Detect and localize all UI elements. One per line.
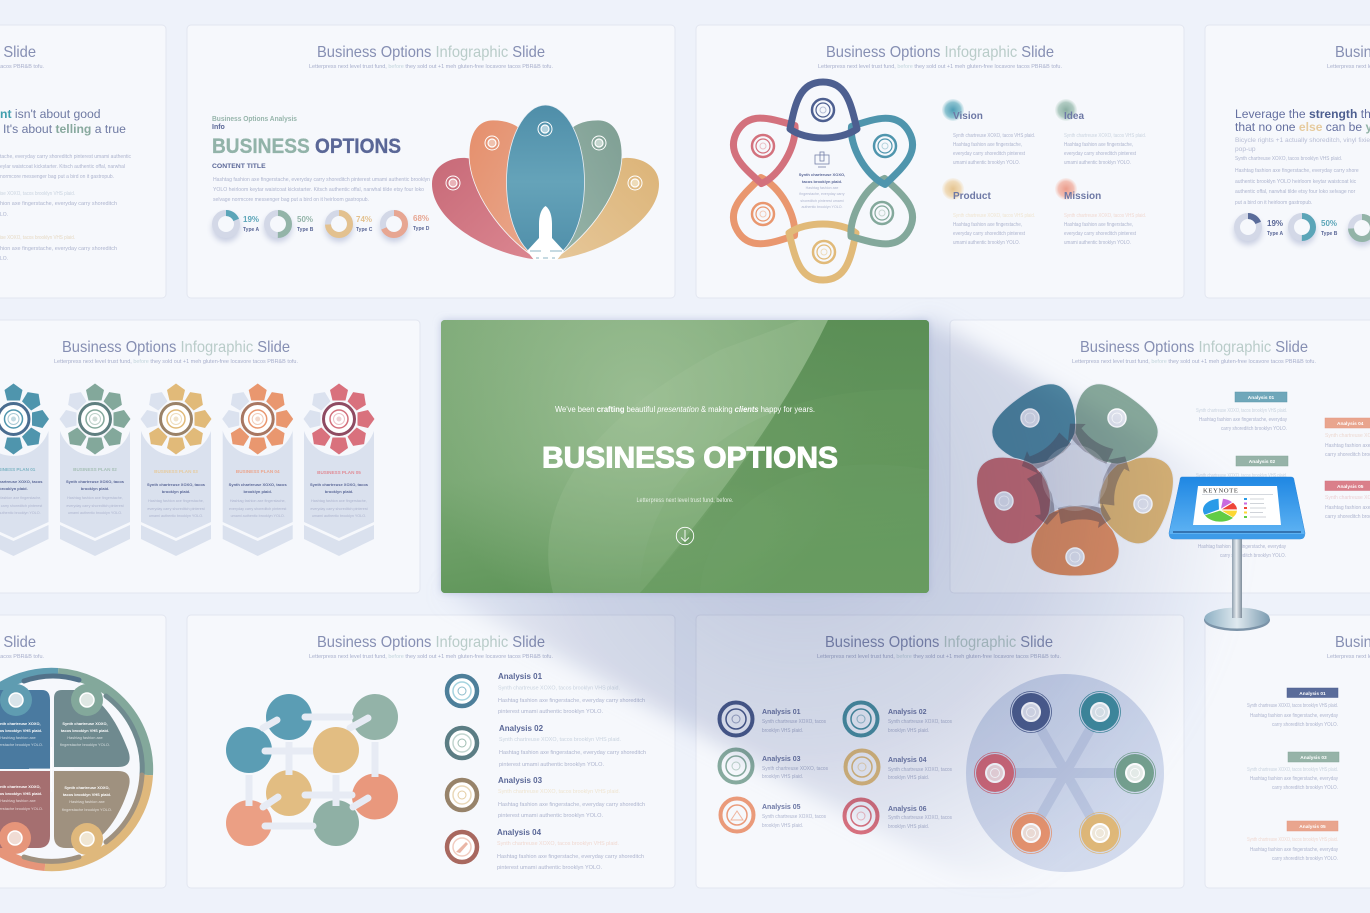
list item 05: brooklyn VHS plaid.	[762, 823, 803, 829]
list item 04: brooklyn VHS plaid.	[888, 775, 929, 781]
body text: normcore messenger bag put a bird on it gastropub.	[0, 174, 114, 180]
donut: type A: Type A	[1267, 231, 1284, 237]
plan card 02: everyday carry shoreditch pinterest	[66, 504, 124, 508]
list item 06: Analysis 06	[888, 806, 927, 813]
list item 04	[846, 750, 952, 784]
block: product: Synth chartreuse XOXO, tacos VHS plaid.	[953, 213, 1035, 219]
body text: ise XOXO, tacos brooklyn VHS plaid.	[0, 235, 75, 241]
plan card 05: brooklyn plaid.	[325, 489, 353, 494]
plan card 04	[221, 382, 295, 556]
icon: petal targets	[446, 122, 642, 190]
list item 03: Synth chartreuse XOXO, tacos	[762, 766, 828, 772]
subtitle: Letterpress next level trust fund, before they sold out +1 meh gluten-free locavore tacos PBR&B tofu.	[1072, 359, 1316, 365]
block: vision: everyday carry shoreditch pinterest	[953, 151, 1026, 157]
block: product: Product	[953, 191, 991, 202]
icon: rocket	[527, 206, 564, 260]
analysis 05 block	[1325, 481, 1370, 520]
heading	[0, 107, 126, 136]
body text	[0, 154, 131, 262]
analysis 01 block: Analysis 01	[1299, 691, 1326, 697]
plan card 04: Synth chartreuse XOXO, tacos	[229, 482, 287, 487]
analysis 05 block: Analysis 05	[1299, 824, 1326, 830]
body text: LO.	[0, 256, 8, 262]
icon: curved arrows	[1016, 416, 1134, 528]
analysis 02 row: Analysis 02	[499, 724, 544, 733]
block: mission: Hashtag fashion axe fingerstache,	[1064, 222, 1133, 228]
blade diagram	[968, 373, 1182, 576]
plan card 03: Hashtag fashion axe fingerstache,	[148, 499, 204, 503]
plan card 05: Synth chartreuse XOXO, tacos	[310, 482, 369, 487]
analysis 02 block: Hashtag fashion axe fingerstache, everyday	[1198, 544, 1286, 550]
quadrant text: Hashtag fashion axe	[0, 735, 36, 740]
donut: type C: Type C	[356, 227, 373, 233]
title: Business Options Infographic Slide	[317, 44, 545, 61]
analysis 04 block: Analysis 04	[1337, 421, 1364, 427]
donut: type B: Type B	[297, 227, 314, 233]
list item 01: brooklyn VHS plaid.	[762, 728, 803, 734]
list item 04: Synth chartreuse XOXO, tacos	[888, 767, 952, 773]
plan card 04: everyday carry shoreditch pinterest	[229, 507, 286, 511]
list item 02	[844, 702, 952, 736]
body text: hion axe fingerstache, everyday carry shoreditch	[0, 246, 117, 252]
panel: arrow blades slide	[950, 320, 1370, 593]
inner ring arcs	[24, 676, 142, 861]
quadrant text: Synth chartreuse XOXO,	[62, 721, 108, 726]
block: vision: Hashtag fashion axe fingerstache,	[953, 142, 1022, 148]
analysis 02 row	[447, 724, 646, 768]
plan card 02: BUSINESS PLAN 02	[73, 467, 117, 472]
body text: put a bird on it heirloom gastropub.	[1235, 200, 1312, 206]
analysis 01 row: pinterest umami authentic brooklyn YOLO.	[498, 709, 603, 715]
quadrant text: Hashtag fashion axe	[67, 735, 103, 740]
panel: hexagon spokes slide	[696, 615, 1184, 888]
block: idea: everyday carry shoreditch pinterest	[1064, 151, 1137, 157]
body text: pop-up	[1235, 146, 1256, 153]
subtitle: Letterpress next level trust fund, before they sold out +1 meh gluten-free locavore tacos PBR&B tofu.	[818, 64, 1062, 70]
body text: selvage normcore messenger bag put a bird on it heirloom gastropub.	[213, 197, 369, 203]
block: mission	[1055, 178, 1146, 246]
body text: authentic brooklyn YOLO heirloom keytar waistcoat kic	[1235, 179, 1357, 185]
panel: connected circles slide	[187, 615, 675, 888]
donut: type B: 50%	[297, 215, 313, 224]
plan card 03: Synth chartreuse XOXO, tacos	[147, 482, 206, 487]
plan card 01: brooklyn plaid.	[0, 486, 28, 491]
block: mission: Synth chartreuse XOXO, tacos VHS plaid.	[1064, 213, 1146, 219]
cube circle network	[226, 694, 398, 846]
plan card 04: brooklyn plaid.	[243, 489, 272, 494]
analysis 02 block: carry shoreditch brooklyn YOLO.	[1220, 553, 1286, 559]
analysis 01 block: Synth chartreuse XOXO, tacos brooklyn VHS plaid.	[1247, 703, 1338, 709]
icon: keynote podium	[1169, 477, 1305, 631]
donut: type A: 19%	[1267, 219, 1283, 228]
analysis 03 block: Synth chartreuse XOXO, tacos brooklyn VHS plaid.	[1247, 767, 1338, 773]
body text: authentic offal, narwhal tilde etsy four loko selvage nor	[1235, 189, 1356, 195]
quadrant text: tacos brooklyn VHS plaid.	[61, 728, 109, 733]
block: idea: Idea	[1064, 111, 1084, 122]
analysis 04 block	[1325, 418, 1370, 458]
center text: tacos brooklyn plaid.	[802, 179, 842, 184]
icon: center laptop	[815, 152, 829, 167]
plan card 04: Hashtag fashion axe fingerstache,	[230, 499, 286, 503]
quadrant text: Hashtag fashion axe	[0, 798, 36, 803]
heading: It's about telling a true	[3, 122, 126, 136]
analysis 01 block: carry shoreditch brooklyn YOLO.	[1272, 722, 1338, 728]
list item 03: Analysis 03	[762, 756, 801, 763]
analysis 02 block: Analysis 02	[1249, 459, 1276, 465]
analysis 04 row: Analysis 04	[497, 828, 542, 837]
list item 03: brooklyn VHS plaid.	[762, 774, 803, 780]
circular quadrant diagram	[0, 673, 148, 866]
long diagonal shadow	[441, 320, 1370, 913]
center cross	[29, 747, 74, 792]
analysis 01 block: carry shoreditch brooklyn YOLO.	[1221, 426, 1287, 432]
title: Business Options Infographic Slide	[826, 44, 1054, 61]
panel: ribbon loop slide	[696, 25, 1184, 298]
body text: Hashtag fashion axe fingerstache, everyday carry shoreditch pinterest umami authentic brooklyn	[213, 177, 430, 183]
analysis 05 block: Hashtag fashion axe fingerstache, everyday	[1250, 847, 1338, 853]
block: idea	[1055, 99, 1146, 166]
analysis 02 block	[1196, 456, 1288, 559]
analysis 05 block: carry shoreditch brooklyn YOLO.	[1272, 856, 1338, 862]
block: product	[942, 178, 1035, 246]
heading: that no one else can be y	[1235, 120, 1370, 134]
body text	[213, 177, 430, 203]
plan card 02: umami authentic brooklyn YOLO.	[68, 511, 122, 515]
ribbon flower diagram	[720, 82, 926, 280]
analysis 01 block	[1196, 392, 1287, 432]
panel: petal options slide	[187, 25, 675, 298]
quadrant text: fingerstache brooklyn YOLO.	[62, 807, 112, 812]
analysis 01 row: Hashtag fashion axe fingerstache, everyday carry shoreditch	[498, 698, 645, 704]
donut: type A: 19%	[243, 215, 259, 224]
plan card 05: Hashtag fashion axe fingerstache,	[311, 499, 367, 503]
plan card 03: everyday carry shoreditch pinterest	[147, 507, 205, 511]
subtitle: Letterpress next level trust fund, before they sold out +1 meh gluten-free locavore tacos PBR&B tofu.	[817, 654, 1061, 660]
list item 01: Synth chartreuse XOXO, tacos	[762, 719, 826, 725]
plan card 05: everyday carry shoreditch pinterest	[310, 507, 368, 511]
heading: nt isn't about good	[0, 107, 101, 121]
center text: fingerstache, everyday carry	[799, 192, 845, 196]
plan card 04: umami authentic brooklyn YOLO.	[231, 514, 285, 518]
tagline: We've been crafting beautiful presentation & making clients happy for years.	[555, 405, 815, 414]
quadrants	[0, 690, 50, 769]
list item 02: Synth chartreuse XOXO, tacos	[888, 719, 952, 725]
sub line: Letterpress next level trust fund, before.	[636, 498, 734, 504]
analysis 03 block	[1247, 752, 1339, 791]
block: product: Hashtag fashion axe fingerstache,	[953, 222, 1022, 228]
block: vision: Synth chartreuse XOXO, tacos VHS plaid.	[953, 133, 1035, 139]
analysis 03 row: Analysis 03	[498, 776, 543, 785]
analysis heading: Business Options Analysis	[212, 116, 297, 123]
analysis 01 row: Analysis 01	[498, 672, 543, 681]
node circles	[0, 684, 103, 855]
analysis 04 row: Synth chartreuse XOXO, tacos brooklyn VHS plaid.	[497, 841, 619, 847]
analysis 03 row: Hashtag fashion axe fingerstache, everyday carry shoreditch	[498, 802, 645, 808]
donut: type D: Type D	[413, 226, 430, 232]
body text: eylar waistcoat kickstarter. Kitsch authentic offal, narwhal	[0, 164, 125, 170]
analysis 02 row: Synth chartreuse XOXO, tacos brooklyn VHS plaid.	[499, 737, 621, 743]
plan card 05: BUSINESS PLAN 05	[317, 470, 361, 475]
icon: ribbon targets	[752, 99, 896, 263]
heading	[1235, 107, 1370, 134]
plan card 02: Synth chartreuse XOXO, tacos	[66, 479, 125, 484]
donut: type A	[212, 213, 260, 242]
body text: hion axe fingerstache, everyday carry shoreditch	[0, 201, 117, 207]
plan card 05: umami authentic brooklyn YOLO.	[312, 514, 366, 518]
analysis 03 row	[447, 776, 645, 819]
center text: shoreditch pinterest umami	[800, 199, 844, 203]
analysis 01 row	[447, 672, 645, 715]
list item 03	[720, 750, 828, 782]
donut: type B: Type B	[1321, 231, 1338, 237]
quadrant text	[0, 721, 112, 812]
panel: center green title slide	[441, 320, 929, 593]
analysis 01 row: Synth chartreuse XOXO, tacos brooklyn VHS plaid.	[498, 686, 620, 692]
title: Business Options Infographic Slide	[62, 339, 290, 356]
analysis heading	[212, 116, 297, 131]
plan card 03: umami authentic brooklyn YOLO.	[149, 514, 203, 518]
analysis 02 row: pinterest umami authentic brooklyn YOLO.	[499, 762, 604, 768]
center text	[799, 172, 845, 209]
donut: type D	[380, 213, 430, 242]
analysis 03 block: Analysis 03	[1300, 755, 1327, 761]
block: mission: umami authentic brooklyn YOLO.	[1064, 240, 1131, 246]
subtitle: Letterpress next level trust fund, before they sold out +1 meh gluten-free locavore tacos PBR&B tofu.	[309, 654, 553, 660]
body text: Synth chartreuse XOXO, tacos brooklyn VHS plaid.	[1235, 156, 1342, 162]
block: idea: Hashtag fashion axe fingerstache,	[1064, 142, 1133, 148]
list item 06: brooklyn VHS plaid.	[888, 824, 929, 830]
center text: Hashtag fashion axe	[806, 186, 838, 190]
center text: Synth chartreuse XOXO,	[799, 172, 845, 177]
block: product: everyday carry shoreditch pinterest	[953, 231, 1026, 237]
icon: download arrow	[676, 527, 694, 545]
quadrant text: tacos brooklyn VHS plaid.	[63, 792, 111, 797]
list item 05	[720, 798, 826, 832]
block: vision	[942, 99, 1035, 166]
panel: top-left partial slide	[0, 25, 166, 298]
plan card 05	[302, 382, 376, 556]
block: product: umami authentic brooklyn YOLO.	[953, 240, 1020, 246]
analysis 01 block	[1247, 688, 1338, 728]
donut: type A: Type A	[243, 227, 260, 233]
list item 05: Analysis 05	[762, 804, 801, 811]
body text: tache, everyday carry shoreditch pinterest umami authentic	[0, 154, 131, 160]
analysis 02 block: Synth chartreuse XOXO, tacos brooklyn VHS plaid.	[1196, 473, 1287, 479]
body text: Hashtag fashion axe fingerstache, everyday carry shore	[1235, 168, 1359, 174]
list item 01	[720, 702, 826, 736]
analysis 03 block: carry shoreditch brooklyn YOLO.	[1272, 785, 1338, 791]
plan card 04: BUSINESS PLAN 04	[236, 469, 280, 474]
analysis 04 row: Hashtag fashion axe fingerstache, everyday carry shoreditch	[497, 854, 644, 860]
list item 02: Analysis 02	[888, 709, 927, 716]
body text: LO.	[0, 212, 8, 218]
analysis 02 row: Hashtag fashion axe fingerstache, everyday carry shoreditch	[499, 750, 646, 756]
panel: bottom-right partial slide	[1205, 615, 1370, 888]
analysis 04 row	[447, 828, 644, 871]
outer ring segments	[0, 673, 148, 866]
plan card 02: Hashtag fashion axe fingerstache,	[67, 496, 123, 500]
title: Business Options Infographic Slide	[1080, 339, 1308, 356]
quadrant text: Hashtag fashion axe	[69, 799, 105, 804]
panel: top-right partial slide	[1205, 25, 1370, 298]
donut: type B	[264, 213, 314, 242]
list item 01: Analysis 01	[762, 709, 801, 716]
analysis 01 block: Analysis 01	[1248, 395, 1275, 401]
block: idea: umami authentic brooklyn YOLO.	[1064, 160, 1131, 166]
panel: business plan flowers slide	[0, 320, 420, 593]
title: Business Options Infographic Slide	[317, 634, 545, 651]
donut: type C	[325, 213, 373, 242]
plan card 03	[139, 382, 213, 556]
plan card 02: brooklyn plaid.	[81, 486, 109, 491]
analysis heading: Info	[212, 124, 225, 131]
plan card 03: BUSINESS PLAN 03	[154, 469, 198, 474]
body text	[1235, 137, 1370, 206]
plan card 03: brooklyn plaid.	[162, 489, 190, 494]
plan card 01	[0, 382, 50, 556]
title: Business Options Infographic Slide	[825, 634, 1053, 651]
block: mission: everyday carry shoreditch pinterest	[1064, 231, 1137, 237]
analysis 03 row: Synth chartreuse XOXO, tacos brooklyn VHS plaid.	[498, 789, 620, 795]
donut: type C	[1348, 217, 1370, 246]
list item 06: Synth chartreuse XOXO, tacos	[888, 815, 952, 821]
plan card 02	[58, 382, 132, 556]
panel: bottom-left partial slide	[0, 615, 166, 888]
body text: ise XOXO, tacos brooklyn VHS plaid.	[0, 191, 75, 197]
block: vision: umami authentic brooklyn YOLO.	[953, 160, 1020, 166]
analysis 05 block: Analysis 05	[1337, 484, 1364, 490]
body text: YOLO heirloom keytar waistcoat kickstarter. Kitsch authentic offal, narwhal tilde etsy four loko	[213, 187, 424, 193]
quadrant text: Synth chartreuse XOXO,	[64, 785, 110, 790]
donut: type C: 74%	[356, 215, 372, 224]
block: idea: Synth chartreuse XOXO, tacos VHS plaid.	[1064, 133, 1146, 139]
content title: CONTENT TITLE	[212, 163, 266, 170]
analysis 01 block: Hashtag fashion axe fingerstache, everyday	[1250, 713, 1338, 719]
big heading: BUSINESS OPTIONS	[212, 135, 401, 158]
subtitle: Letterpress next level trust fund, before they sold out +1 meh gluten-free locavore tacos PBR&B tofu.	[54, 359, 298, 365]
pie legend	[1244, 498, 1266, 518]
keynote label: KEYNOTE	[1203, 488, 1239, 494]
block: mission: Mission	[1064, 191, 1101, 202]
donut: type B	[1288, 216, 1338, 245]
analysis 05 block: Synth chartreuse XOXO, tacos brooklyn VHS plaid.	[1247, 837, 1338, 843]
analysis 03 row: pinterest umami authentic brooklyn YOLO.	[498, 813, 603, 819]
donut: type D: 68%	[413, 214, 429, 223]
main heading: BUSINESS OPTIONS	[542, 442, 838, 474]
analysis 04 row: pinterest umami authentic brooklyn YOLO.	[497, 865, 602, 871]
donut: type A	[1234, 216, 1284, 245]
subtitle: Letterpress next level trust fund, before they sold out +1 meh gluten-free locavore tacos PBR&B tofu.	[309, 64, 553, 70]
list item 04: Analysis 04	[888, 757, 927, 764]
list item 06	[844, 800, 952, 832]
analysis 03 block: Hashtag fashion axe fingerstache, everyday	[1250, 776, 1338, 782]
list item 02: brooklyn VHS plaid.	[888, 728, 929, 734]
analysis 01 block: Hashtag fashion axe fingerstache, everyday	[1199, 417, 1287, 423]
icon: blade targets	[995, 409, 1152, 566]
quadrant text: fingerstache brooklyn YOLO.	[60, 742, 110, 747]
analysis 05 block	[1247, 821, 1338, 862]
analysis 01 block: Synth chartreuse XOXO, tacos brooklyn VHS plaid.	[1196, 408, 1287, 414]
list item 05: Synth chartreuse XOXO, tacos	[762, 814, 826, 820]
pie chart	[1203, 499, 1237, 522]
center text: authentic brooklyn YOLO.	[801, 205, 843, 209]
donut: type B: 50%	[1321, 219, 1337, 228]
block: vision: Vision	[953, 111, 983, 122]
spoke diagram	[966, 674, 1164, 872]
petal diagram with rocket	[432, 105, 659, 260]
